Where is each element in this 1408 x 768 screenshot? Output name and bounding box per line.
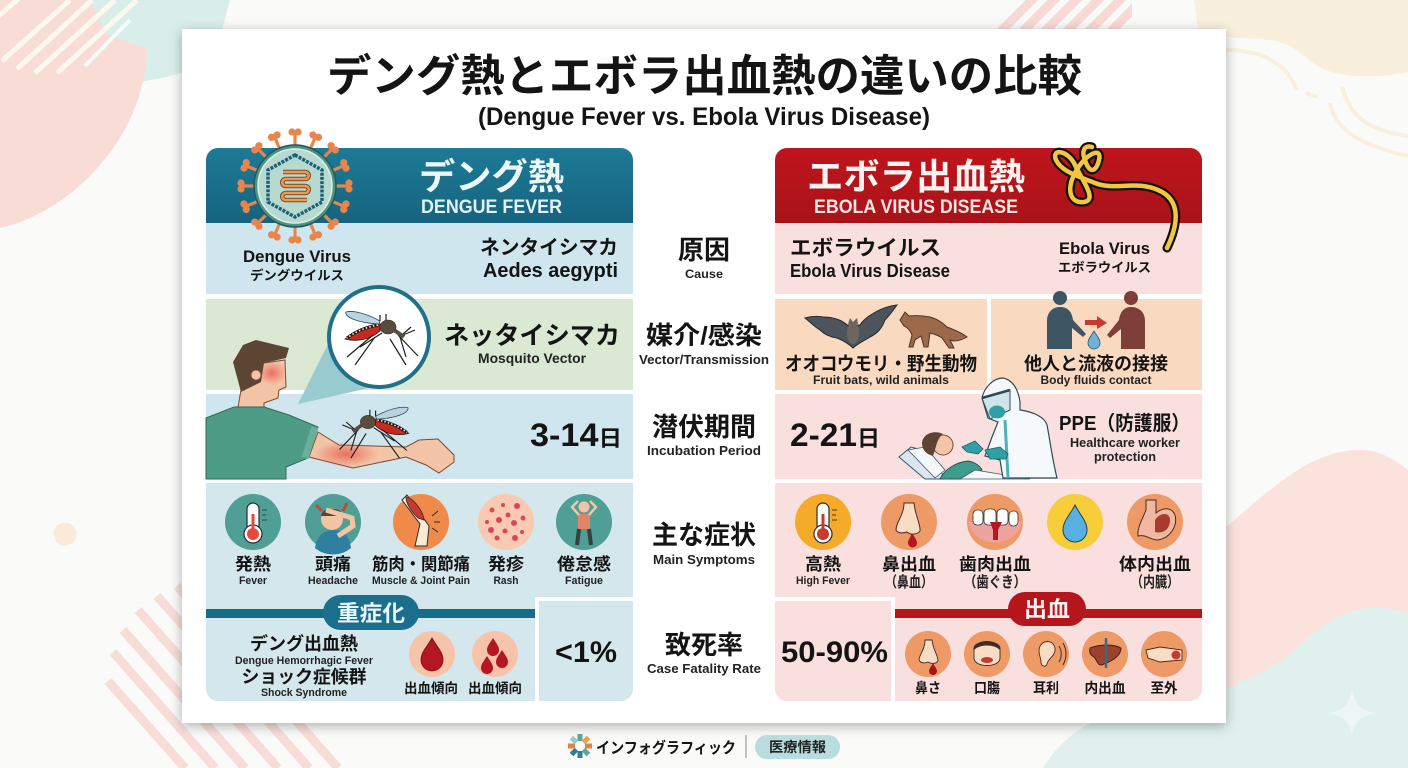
icon: dengue virus: [237, 128, 353, 244]
text: mosquito vector: Mosquito Vector: [478, 350, 587, 366]
symptom labels: ebola: 高熱: [805, 554, 841, 574]
text: ebola virus: [1058, 240, 1151, 275]
title: デング熱とエボラ出血熱の違いの比較: [327, 52, 1082, 101]
text: ebola cause: [790, 237, 950, 281]
text: dengue cause: ネンタイシマカ: [480, 236, 618, 259]
icon: nosebleed: [881, 494, 937, 550]
label: incubation: [647, 412, 761, 458]
symptom labels: dengue: Fatigue: [565, 575, 603, 587]
label: symptoms: Main Symptoms: [653, 552, 755, 567]
icon: two people contact: [1047, 291, 1145, 349]
text: dengue virus: デングウイルス: [250, 268, 344, 283]
label: vector: 媒介/感染: [646, 322, 762, 350]
text: severe forms: ショック症候群: [242, 667, 366, 687]
footer tag: 医療情報: [769, 739, 826, 755]
text: ebola fatality rate: 50-90%: [781, 636, 888, 669]
text: severe forms: デング出血熱: [250, 633, 358, 654]
text: severe forms: Dengue Hemorrhagic Fever: [235, 655, 374, 667]
icon: nose bleed: 鼻さ: [915, 680, 941, 696]
icon: blood drop: [404, 631, 458, 696]
icon: mouth bleed: 口膓: [974, 680, 1000, 696]
text: ppe: [1059, 412, 1190, 464]
symptom labels: ebola: 歯肉出血: [959, 555, 1031, 574]
icon: headache: [305, 494, 361, 555]
label: symptoms: [652, 520, 756, 567]
symptom labels: ebola: High Fever: [796, 575, 851, 587]
text: ppe: protection: [1094, 449, 1156, 464]
icon: rash: [478, 494, 534, 550]
icon: nose bleed: [905, 631, 951, 696]
text: dengue fatality rate: <1%: [555, 636, 617, 669]
symptom labels: dengue: 頭痛: [315, 554, 351, 574]
symptoms row: dengue: [225, 494, 612, 587]
symptom labels: ebola: 体内出血: [1119, 555, 1191, 574]
hemorrhage banner: 出血: [1024, 597, 1070, 622]
text: fruit bats: [785, 353, 977, 387]
symptom labels: dengue: Headache: [308, 575, 358, 587]
icon: footer logo: [568, 734, 592, 758]
icon: gum bleeding: [967, 494, 1023, 550]
symptom labels: ebola: （歯ぐき）: [964, 573, 1026, 591]
symptom labels: dengue: [235, 554, 611, 587]
text: mosquito vector: ネッタイシマカ: [444, 322, 620, 350]
panel: ebola: [775, 147, 1202, 701]
icon: fever: [225, 494, 281, 550]
dengue panel backgrounds: [206, 148, 633, 701]
icon: high fever: [795, 494, 851, 550]
text: dengue virus: [243, 247, 351, 283]
footer tag: [755, 735, 840, 759]
text: dengue cause: [480, 236, 618, 282]
symptoms row: ebola: [795, 494, 1191, 591]
text: fruit bats: Fruit bats, wild animals: [813, 373, 949, 387]
dengue header text: [419, 156, 564, 218]
icon: liver internal bleed: 内出血: [1084, 680, 1126, 696]
text: body fluid contact: [1024, 354, 1168, 387]
icon: hand bruise: 至外: [1150, 680, 1178, 696]
text: ebola virus: エボラウイルス: [1058, 260, 1151, 275]
label: fatality: Case Fatality Rate: [647, 661, 761, 676]
label: vector: [639, 322, 769, 367]
icon: ear bleed: [1023, 631, 1069, 696]
symptom labels: dengue: 倦怠感: [557, 554, 611, 574]
severe banner: [206, 595, 535, 630]
symptom labels: ebola: （鼻血）: [885, 573, 933, 591]
text: ebola virus: Ebola Virus: [1059, 240, 1150, 258]
subtitle: (Dengue Fever vs. Ebola Virus Disease): [478, 103, 930, 131]
footer: [568, 734, 840, 759]
text: body fluid contact: Body fluids contact: [1040, 373, 1152, 387]
symptom labels: dengue: 発熱: [235, 555, 271, 574]
symptom labels: dengue: Fever: [239, 575, 268, 587]
hemorrhage icons: [905, 631, 1187, 696]
text: fruit bats: オオコウモリ・野生動物: [785, 353, 977, 375]
ebola header text: EBOLA VIRUS DISEASE: [814, 197, 1018, 218]
severe banner: 重症化: [337, 601, 405, 626]
ebola header text: エボラ出血熱: [807, 156, 1025, 197]
text: mosquito vector: [444, 322, 620, 366]
icon: fatigue: [556, 494, 612, 550]
icon: hand bruise: [1141, 631, 1187, 696]
text: ppe: Healthcare worker: [1070, 435, 1180, 450]
icon: blood drops: 出血傾向: [468, 680, 522, 696]
icon: ebola virus: [1055, 147, 1176, 248]
label: cause: [678, 235, 730, 281]
label: fatality: [647, 630, 761, 676]
dengue header text: DENGUE FEVER: [421, 197, 562, 218]
icon: blood drop: 出血傾向: [404, 680, 458, 696]
label: incubation: 潜伏期間: [652, 412, 756, 442]
icon: blood drops: [468, 631, 522, 696]
symptom labels: ebola: [796, 554, 1191, 591]
text: severe forms: [235, 633, 374, 699]
symptom labels: ebola: （内臓）: [1131, 573, 1179, 591]
text: body fluid contact: 他人と流液の接接: [1024, 354, 1168, 374]
icon: water drop: [1047, 494, 1103, 550]
icon: magnified mosquito: [329, 287, 429, 387]
symptom labels: dengue: 筋肉・関節痛: [372, 554, 470, 574]
label: incubation: Incubation Period: [647, 443, 761, 458]
text: ebola cause: Ebola Virus Disease: [790, 261, 950, 281]
label: fatality: 致死率: [665, 630, 743, 660]
text: dengue cause: Aedes aegypti: [483, 260, 618, 282]
footer brand: インフォグラフィック: [596, 738, 736, 757]
symptom labels: dengue: Muscle & Joint Pain: [372, 575, 470, 587]
center labels: [639, 235, 769, 676]
ebola panel backgrounds: [775, 148, 1202, 701]
text: dengue virus: Dengue Virus: [243, 247, 351, 266]
text: ppe: PPE（防護服）: [1059, 412, 1190, 435]
icon: mouth bleed: [964, 631, 1010, 696]
ebola header text: [807, 156, 1025, 218]
text: severe forms: Shock Syndrome: [261, 687, 347, 699]
text: ebola incubation: 2-21日: [790, 417, 880, 453]
illustration: person with mosquito bite: [206, 340, 454, 479]
symptom labels: dengue: 発疹: [488, 555, 524, 574]
icon: internal bleeding stomach: [1127, 494, 1183, 550]
icon: ear bleed: 耳利: [1033, 680, 1059, 696]
label: vector: Vector/Transmission: [639, 353, 769, 367]
label: symptoms: 主な症状: [652, 520, 756, 550]
hemorrhage banner: [895, 592, 1202, 626]
text: ebola cause: エボラウイルス: [790, 237, 941, 260]
dengue header text: デング熱: [419, 156, 564, 197]
symptom labels: ebola: 鼻出血: [882, 554, 936, 574]
icon: liver internal bleed: [1082, 631, 1128, 696]
symptom labels: dengue: Rash: [494, 575, 519, 587]
label: cause: 原因: [678, 235, 730, 265]
icon: muscle and joint pain: [393, 494, 449, 550]
panel: dengue: [206, 128, 633, 701]
icon: fruit bat: [805, 305, 897, 348]
icon: wild animal: [900, 312, 967, 348]
text: incubation days: 3-14日: [530, 417, 622, 453]
white card: [182, 29, 1226, 723]
label: cause: Cause: [685, 267, 723, 281]
illustration: healthcare worker with patient: [899, 378, 1057, 479]
